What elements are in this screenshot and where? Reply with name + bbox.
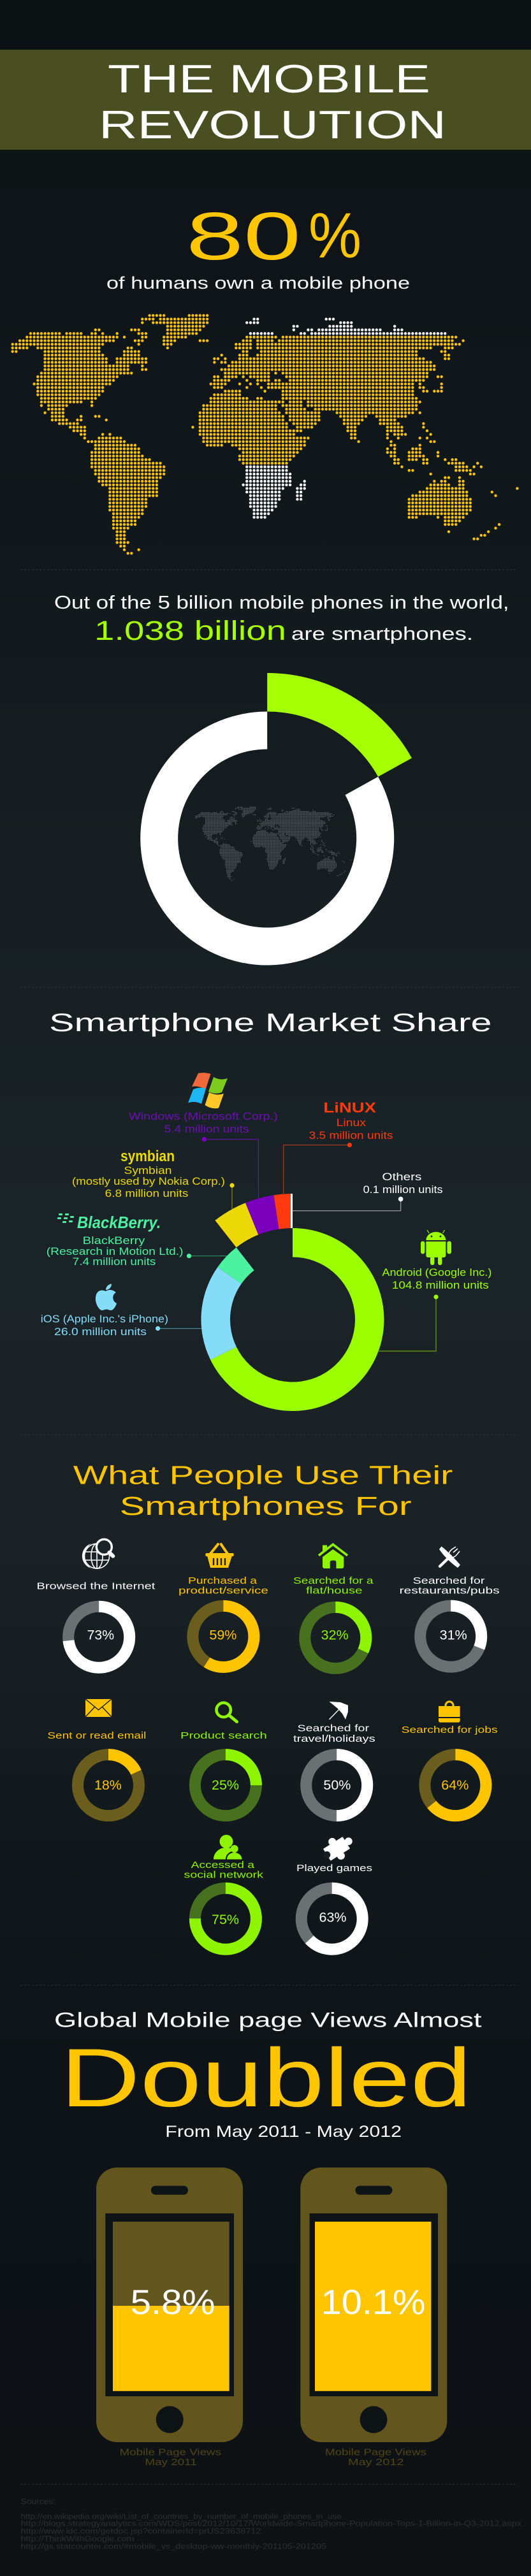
usage item: browsed the internet: 73% bbox=[87, 1628, 114, 1642]
sources: http://ThinkWithGoogle.com bbox=[20, 2535, 134, 2543]
usage item: searched for travel: 50% bbox=[323, 1778, 351, 1793]
sources: Sources: bbox=[20, 2498, 55, 2506]
caption: may 2012 bbox=[325, 2447, 426, 2468]
donut 18% bbox=[78, 1755, 139, 1816]
market share chart bbox=[201, 1194, 384, 1411]
caption: may 2012: Mobile Page Views bbox=[325, 2447, 426, 2457]
usage item: searched for a flat or house: Searched for a bbox=[293, 1575, 374, 1586]
heading: global mobile page views doubled: From May 2011 - May 2012 bbox=[165, 2123, 402, 2141]
caption: may 2011: May 2011 bbox=[145, 2457, 197, 2468]
sources bbox=[20, 2498, 521, 2551]
segment: android bbox=[210, 1228, 384, 1411]
usage item: searched for travel: Searched for bbox=[297, 1723, 369, 1734]
usage item: played games: Played games bbox=[296, 1863, 372, 1874]
usage item: sent or read email: Sent or read email bbox=[47, 1730, 146, 1741]
callout: ios: 26.0 million units bbox=[54, 1326, 147, 1338]
caption: may 2011 bbox=[120, 2447, 221, 2468]
icon: knife and fork bbox=[439, 1546, 460, 1568]
callout: windows: 5.4 million units bbox=[164, 1124, 249, 1135]
callout: ios: iOS (Apple Inc.'s iPhone) bbox=[41, 1313, 168, 1325]
sources: http://gs.statcounter.com/#mobile_vs_desktop-ww-monthly-201105-201205 bbox=[20, 2543, 326, 2551]
phone: may 2012: 10.1% bbox=[321, 2282, 425, 2322]
callout: blackberry: BlackBerry bbox=[83, 1235, 145, 1247]
callout: windows: Windows (Microsoft Corp.) bbox=[129, 1111, 278, 1122]
sources: http://blogs.strategyanalytics.com/WDS/post/2012/10/17/Worldwide-Smartphone-Population-Tops-1-Billion-in-Q3-2012.aspx bbox=[20, 2520, 521, 2528]
callout: symbian: symbian bbox=[120, 1148, 175, 1165]
smartphones heading: 1.038 billion bbox=[94, 616, 286, 646]
usage item: accessed a social network: social network bbox=[184, 1870, 264, 1881]
icon: envelope bbox=[85, 1699, 112, 1717]
usage item: searched for travel: travel/holidays bbox=[293, 1733, 375, 1744]
smartphones heading bbox=[54, 593, 509, 646]
segment: ios bbox=[201, 1267, 242, 1360]
stat: 80 percent: 80 bbox=[186, 199, 301, 274]
callout: linux bbox=[284, 1100, 393, 1194]
icon: android robot bbox=[421, 1230, 451, 1265]
icon: briefcase bbox=[439, 1702, 460, 1723]
segment: symbian bbox=[215, 1203, 258, 1247]
icon: blackberry dots bbox=[57, 1213, 74, 1223]
callout: symbian: 6.8 million units bbox=[105, 1188, 188, 1199]
heading: global mobile page views doubled bbox=[54, 2009, 482, 2141]
usage item: searched for restaurants: Searched for bbox=[413, 1575, 484, 1586]
callout: symbian: Symbian bbox=[124, 1165, 172, 1176]
callout: linux: 3.5 million units bbox=[309, 1130, 393, 1141]
usage item: browsed the internet: Browsed the Internet bbox=[36, 1581, 156, 1591]
donut 50% bbox=[306, 1755, 367, 1816]
icon: windows flag bbox=[188, 1073, 228, 1108]
usage item: accessed a social network: 75% bbox=[212, 1913, 239, 1927]
icon: apple bbox=[96, 1284, 117, 1310]
sources: http://en.wikipedia.org/wiki/List_of_countries_by_number_of_mobile_phones_in_use bbox=[20, 2513, 342, 2521]
usage item: searched for a flat or house bbox=[293, 1544, 374, 1668]
callout: blackberry: (Research in Motion Ltd.) bbox=[47, 1246, 184, 1257]
donut 31% bbox=[420, 1606, 481, 1667]
donut 63% bbox=[302, 1888, 363, 1950]
callout: windows bbox=[129, 1073, 278, 1199]
usage item: searched for a flat or house: 32% bbox=[321, 1628, 349, 1642]
stat: 80 percent: % bbox=[309, 200, 361, 271]
usage item: purchased a product: product/service bbox=[178, 1586, 268, 1596]
title text: THE MOBILE bbox=[108, 57, 430, 101]
phone: may 2011: 5.8% bbox=[131, 2282, 215, 2322]
icon: house bbox=[319, 1544, 347, 1568]
usage item: searched for jobs bbox=[402, 1702, 498, 1816]
icon: globe search bbox=[82, 1539, 113, 1568]
usage item: sent or read email: 18% bbox=[94, 1778, 122, 1793]
usage item: product search: 25% bbox=[212, 1778, 239, 1793]
phone: may 2012 bbox=[300, 2167, 447, 2442]
smartphones heading: are smartphones. bbox=[291, 624, 473, 644]
callout: blackberry: 7.4 million units bbox=[73, 1256, 156, 1268]
usage item: purchased a product bbox=[178, 1544, 268, 1667]
heading: global mobile page views doubled: Global Mobile page Views Almost bbox=[54, 2009, 482, 2032]
heading: smartphone market share: Smartphone Market Share bbox=[49, 1009, 492, 1037]
callout: android bbox=[377, 1230, 491, 1351]
usage item: searched for restaurants: 31% bbox=[440, 1628, 467, 1642]
usage item: searched for a flat or house: flat/house bbox=[306, 1586, 362, 1596]
callout: others bbox=[293, 1171, 443, 1211]
usage item: searched for restaurants bbox=[399, 1546, 500, 1667]
usage item: played games bbox=[296, 1829, 372, 1950]
sources: http://www.idc.com/getdoc.jsp?containerId=prUS23638712 bbox=[20, 2528, 261, 2536]
icon: shopping basket bbox=[205, 1544, 234, 1568]
title text: REVOLUTION bbox=[99, 103, 446, 147]
callout: symbian: (mostly used by Nokia Corp.) bbox=[72, 1176, 225, 1187]
icon: magnifying glass bbox=[217, 1703, 237, 1722]
usage item: purchased a product: Purchased a bbox=[188, 1575, 258, 1586]
small grey world map bbox=[196, 807, 351, 880]
smartphones heading: Out of the 5 billion mobile phones in the world, bbox=[54, 593, 509, 613]
heading: global mobile page views doubled: Doubled bbox=[61, 2031, 472, 2124]
callout: others: Others bbox=[382, 1171, 421, 1183]
segment: windows bbox=[245, 1195, 279, 1234]
usage item: searched for travel bbox=[293, 1702, 375, 1816]
stat: 80 percent bbox=[106, 199, 410, 293]
usage item: product search bbox=[180, 1703, 267, 1816]
usage item: purchased a product: 59% bbox=[209, 1628, 236, 1642]
callout: ios bbox=[41, 1284, 201, 1338]
caption: may 2012: May 2012 bbox=[348, 2457, 404, 2468]
usage item: sent or read email bbox=[47, 1699, 146, 1816]
stat: 80 percent: of humans own a mobile phone bbox=[106, 273, 410, 293]
callout: android: 104.8 million units bbox=[392, 1280, 489, 1291]
donut: smartphones of all phones bbox=[140, 673, 412, 966]
callout: linux: Linux bbox=[337, 1117, 367, 1129]
donut 32% bbox=[305, 1607, 366, 1668]
donut 75% bbox=[195, 1888, 256, 1950]
usage item: played games: 63% bbox=[319, 1911, 347, 1925]
dotted world map bbox=[13, 315, 518, 553]
usage item: accessed a social network bbox=[184, 1835, 264, 1950]
usage item: product search: Product search bbox=[180, 1730, 267, 1741]
heading: what people use their smartphones for bbox=[73, 1460, 453, 1521]
heading: what people use their smartphones for: Smartphones For bbox=[120, 1491, 412, 1521]
callout: blackberry bbox=[47, 1213, 227, 1268]
callout: android: Android (Google Inc.) bbox=[382, 1267, 491, 1278]
title text bbox=[99, 57, 446, 147]
usage item: searched for jobs: 64% bbox=[441, 1778, 469, 1793]
callout: symbian bbox=[72, 1148, 235, 1209]
phone: may 2011 bbox=[96, 2167, 243, 2442]
callout: blackberry: BlackBerry. bbox=[77, 1213, 161, 1232]
segment: linux bbox=[274, 1194, 291, 1229]
icon: people bbox=[214, 1835, 242, 1860]
usage item: searched for jobs: Searched for jobs bbox=[402, 1725, 498, 1735]
callout: linux: LiNUX bbox=[323, 1100, 376, 1116]
segment: blackberry bbox=[217, 1247, 254, 1284]
donut 73% bbox=[68, 1607, 129, 1668]
segment: others bbox=[291, 1194, 293, 1228]
heading: what people use their smartphones for: What People Use Their bbox=[73, 1460, 453, 1489]
icon: beach umbrella bbox=[329, 1702, 348, 1719]
donut 59% bbox=[193, 1606, 254, 1667]
callout: others: 0.1 million units bbox=[363, 1184, 443, 1196]
donut 25% bbox=[195, 1755, 256, 1816]
title banner bbox=[0, 50, 531, 150]
caption: may 2011: Mobile Page Views bbox=[120, 2447, 221, 2457]
usage item: accessed a social network: Accessed a bbox=[191, 1860, 255, 1870]
icon: puzzle piece bbox=[317, 1829, 358, 1867]
donut 64% bbox=[425, 1755, 486, 1816]
usage item: searched for restaurants: restaurants/pubs bbox=[399, 1586, 500, 1596]
usage item: browsed the internet bbox=[36, 1539, 156, 1668]
